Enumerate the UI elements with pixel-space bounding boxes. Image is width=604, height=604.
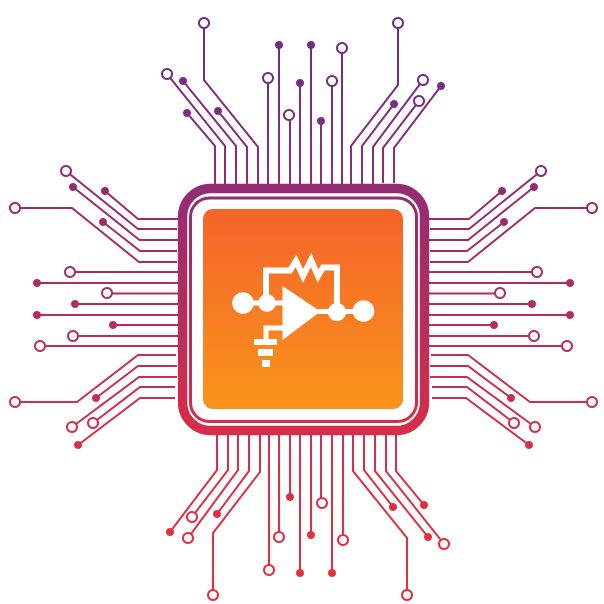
traces: right bbox=[429, 166, 597, 449]
chip body bbox=[183, 188, 424, 430]
output terminals bbox=[318, 300, 374, 322]
chip outer frame bbox=[183, 188, 424, 430]
op-amp triangle bbox=[282, 286, 320, 340]
icon: op-amp circuit bbox=[232, 260, 374, 367]
feedback resistor bbox=[266, 260, 337, 312]
traces: bottom bbox=[166, 434, 449, 600]
chip inner frame bbox=[190, 198, 416, 422]
traces: top bbox=[162, 18, 445, 184]
traces: left bbox=[10, 166, 178, 449]
ground symbol bbox=[254, 328, 285, 367]
chip orange core bbox=[203, 209, 403, 409]
input terminals bbox=[232, 292, 285, 314]
